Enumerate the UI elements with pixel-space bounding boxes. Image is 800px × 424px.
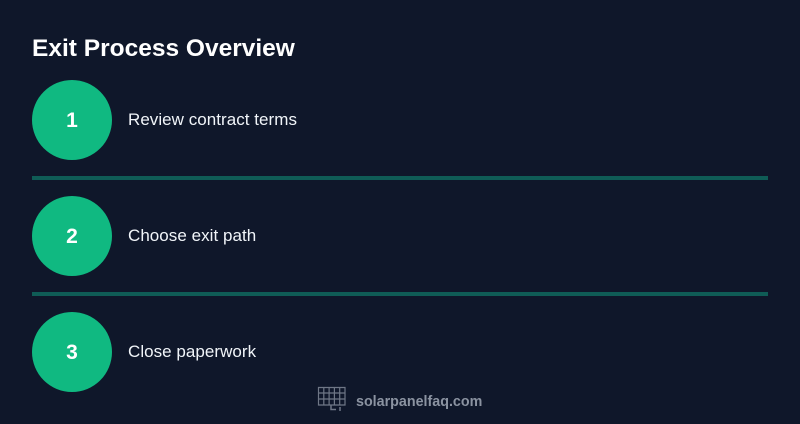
step 3 number circle: 3 [66,341,78,364]
step 1 number circle: 1 [66,109,78,132]
icon: solar panel [318,386,346,411]
step 3 [32,312,256,392]
step 2 number circle: 2 [66,225,78,248]
step 1 number circle [32,80,112,160]
step 2 label: Choose exit path [128,226,256,245]
title: Exit Process Overview [32,35,295,62]
step 2 number circle [32,196,112,276]
website name: solarpanelfaq.com [356,394,482,410]
step 3 label: Close paperwork [128,342,256,361]
step 3 number circle [32,312,112,392]
step 1 label: Review contract terms [128,110,297,129]
step 2 [32,196,256,276]
footer logo [318,386,482,411]
step 1 [32,80,297,160]
